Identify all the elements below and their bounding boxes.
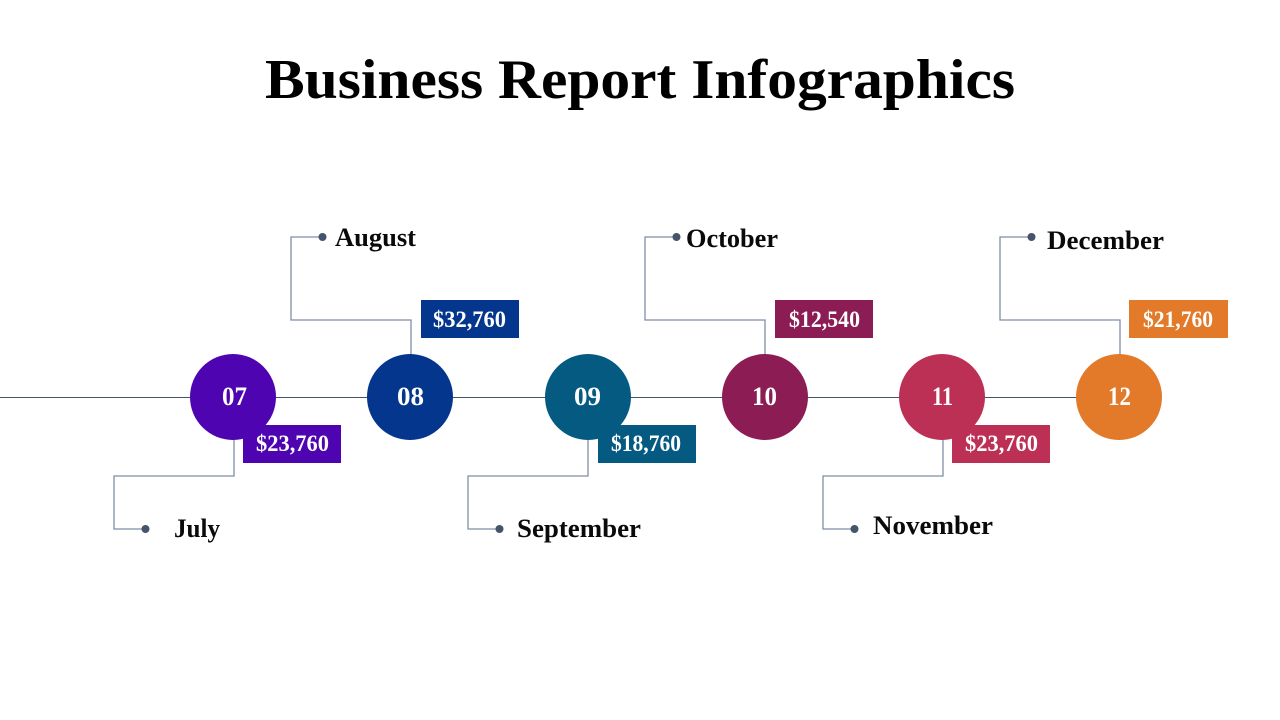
milestone: December: December [1047,225,1164,255]
milestone: September [468,354,696,543]
milestone: August: August [335,222,416,252]
milestone: October [645,223,873,440]
milestone: November [823,354,1050,540]
title: Business Report Infographics [265,49,1015,111]
milestone: September: September [517,513,641,543]
milestone: October: October [686,223,778,253]
milestone: July: 07 [222,382,247,411]
milestone: September: $18,760 [611,431,681,457]
milestone: December: 12 [1108,382,1131,411]
milestone: December [1000,225,1228,440]
milestone: October: $12,540 [789,307,860,333]
milestone: July: $23,760 [256,431,329,457]
milestone: August [291,222,519,440]
milestone: August: $32,760 [433,307,506,333]
milestone: December: $21,760 [1143,307,1213,333]
timeline axis [0,396,1119,398]
milestone: November: 11 [932,382,953,411]
milestone: July [114,354,341,543]
milestone: September: 09 [574,382,601,411]
milestone: August: 08 [397,382,424,411]
milestone: October: 10 [752,382,777,411]
milestone: July: July [174,513,220,543]
milestone: November: November [873,510,993,540]
milestone: November: $23,760 [965,431,1038,457]
